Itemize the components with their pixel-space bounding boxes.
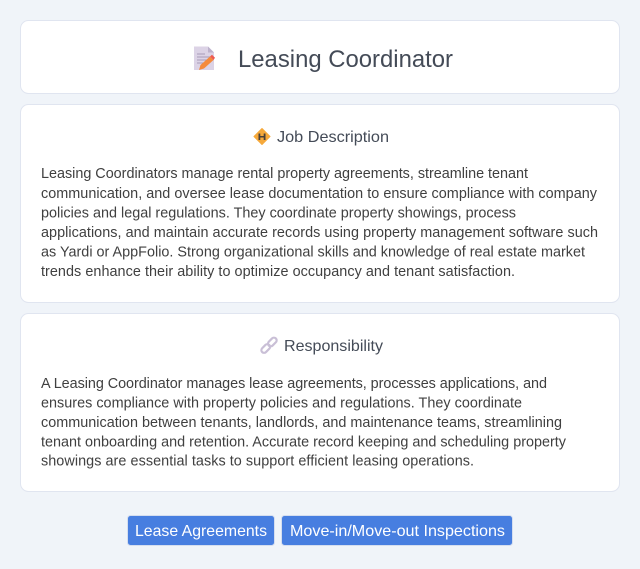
button: move-in/move-out inspections: Move-in/Move-out Inspections xyxy=(290,523,505,540)
text block: job description xyxy=(41,166,598,280)
text block: responsibility: ensures compliance with property policies and regulations. They coordinate xyxy=(41,396,522,412)
text block: job description: as Yardi or AppFolio. Strong organizational skills and knowledge of real estate market xyxy=(41,244,585,260)
icon: chain link xyxy=(260,337,278,354)
button: lease agreements xyxy=(128,516,274,546)
panel: title card xyxy=(20,20,620,94)
title: Leasing Coordinator xyxy=(238,46,453,73)
text block: responsibility: tenant onboarding and retention. Accurate record keeping and scheduling property xyxy=(41,434,567,450)
text block: job description: applications, and maintain accurate records using property management software such xyxy=(41,225,598,241)
text block: job description: communication, and oversee lease documentation to ensure compliance with company xyxy=(41,186,598,202)
text block: responsibility: communication between tenants, landlords, and maintenance teams, streamlining xyxy=(41,415,562,431)
button: move-in/move-out inspections xyxy=(282,516,512,546)
text block: job description: Leasing Coordinators manage rental property agreements, streamline tenant xyxy=(41,166,528,182)
text block: job description: trends enhance their ability to optimize occupancy and tenant satisfaction. xyxy=(41,264,515,280)
heading: job description: Job Description xyxy=(277,129,389,146)
button: lease agreements: Lease Agreements xyxy=(135,523,267,540)
icon: orange diamond sign xyxy=(254,128,270,144)
panel: responsibility xyxy=(20,314,620,492)
text block: responsibility: showings are essential tasks to support efficient leasing operations. xyxy=(41,454,474,470)
panel: job description xyxy=(20,104,620,302)
text block: responsibility xyxy=(41,376,567,470)
text block: job description: policies and legal regulations. They coordinate property showings, process xyxy=(41,206,516,222)
heading: responsibility: Responsibility xyxy=(284,338,383,355)
text block: responsibility: A Leasing Coordinator manages lease agreements, processes applications, and xyxy=(41,376,547,392)
icon: document with pencil xyxy=(194,46,215,70)
